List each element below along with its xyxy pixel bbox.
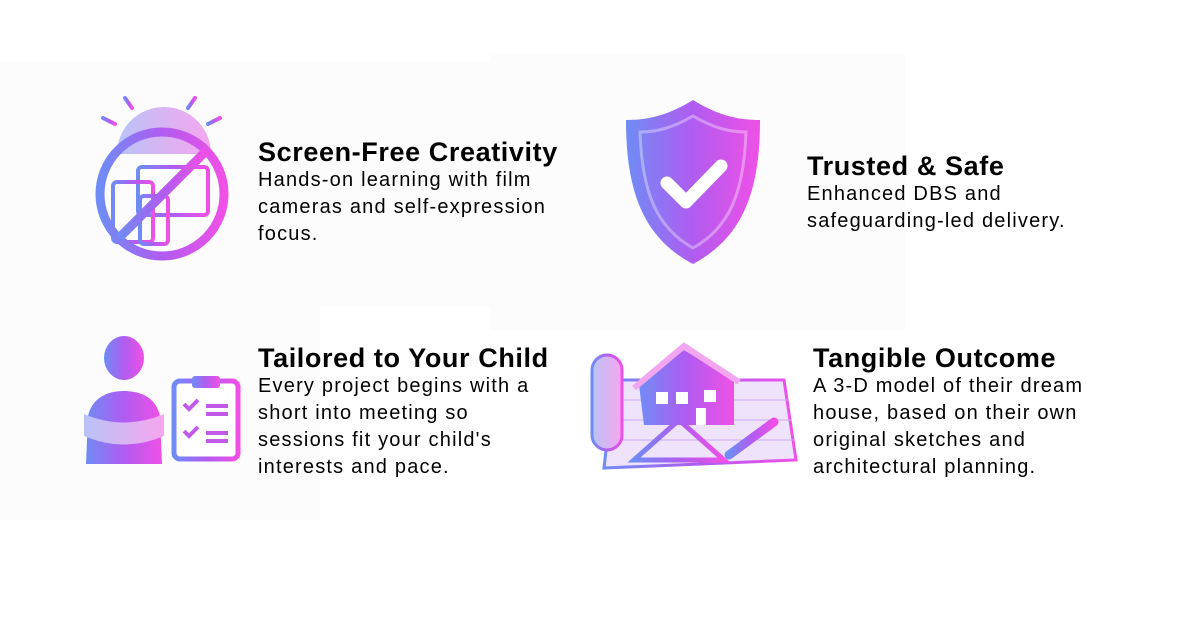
text: screen-free creativity: focus. — [258, 223, 319, 245]
text: tailored to your child: sessions fit your child's — [258, 429, 492, 451]
text: tailored to your child: short into meeting so — [258, 402, 469, 424]
text: tangible outcome: original sketches and — [813, 429, 1026, 451]
text: screen-free creativity: Hands-on learning with film — [258, 169, 532, 191]
text: tangible outcome: A 3-D model of their dream — [813, 375, 1083, 397]
text: trusted & safe: Trusted & Safe — [807, 151, 1004, 181]
text: trusted & safe — [807, 151, 1066, 232]
text: tailored to your child — [258, 343, 549, 478]
text: tangible outcome: house, based on their own — [813, 402, 1078, 424]
text: tailored to your child: Every project begins with a — [258, 375, 529, 397]
text: tangible outcome: architectural planning. — [813, 456, 1036, 478]
text: trusted & safe: safeguarding-led delivery. — [807, 210, 1066, 232]
text: tangible outcome — [813, 343, 1083, 478]
icon: child with checklist — [84, 336, 240, 464]
text: screen-free creativity: cameras and self-expression — [258, 196, 546, 218]
text: tangible outcome: Tangible Outcome — [813, 343, 1056, 373]
text: screen-free creativity — [258, 137, 558, 245]
text: screen-free creativity: Screen-Free Creativity — [258, 137, 558, 167]
text: tailored to your child: interests and pace. — [258, 456, 450, 478]
icon: no screens — [96, 96, 228, 260]
icon: shield — [626, 100, 760, 264]
text: tailored to your child: Tailored to Your Child — [258, 343, 549, 373]
icon: house blueprint — [590, 342, 798, 470]
text: trusted & safe: Enhanced DBS and — [807, 183, 1002, 205]
